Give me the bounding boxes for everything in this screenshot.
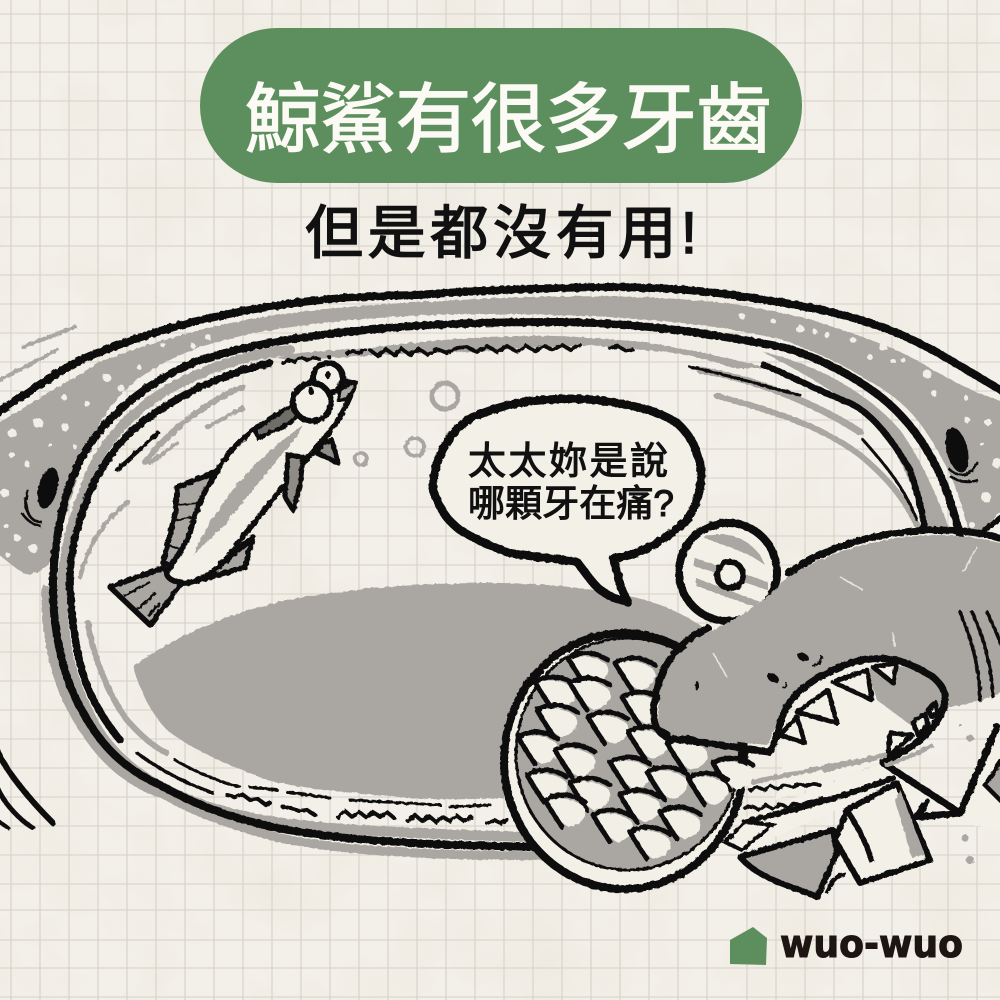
jaw lines bbox=[745, 778, 893, 822]
small loop bbox=[826, 874, 846, 893]
whale body gray band bbox=[0, 296, 1000, 574]
goby fish bbox=[110, 363, 356, 625]
gray gum band under upper lip bbox=[277, 336, 767, 368]
shark lower jaw bbox=[743, 727, 1000, 848]
bubbles bbox=[355, 383, 458, 465]
fish tail bbox=[110, 568, 182, 625]
mirror disc bbox=[679, 523, 777, 621]
shark outline bbox=[654, 530, 1000, 817]
gray mouth linings bbox=[0, 327, 918, 856]
title text: 鯨鯊有很多牙齒 bbox=[245, 78, 772, 163]
right edge fin bbox=[985, 755, 1000, 805]
speckles bbox=[958, 724, 974, 864]
shark dentist bbox=[654, 515, 1000, 897]
back of mouth bbox=[867, 666, 945, 727]
scales bbox=[518, 653, 753, 859]
whale eye right bbox=[941, 425, 978, 482]
small gray stroke near jaw corner bbox=[885, 745, 933, 765]
speech line one: 太太妳是說 bbox=[468, 441, 668, 483]
white spots on whale bbox=[0, 313, 1000, 558]
mirror centre ring bbox=[717, 562, 743, 588]
mirror stripes bbox=[694, 534, 768, 607]
anal fin bbox=[190, 537, 253, 583]
top right fin line bbox=[980, 515, 1000, 533]
round scale patch bbox=[504, 633, 753, 889]
white strip to patch bbox=[725, 822, 772, 850]
speech line two: 哪顆牙在痛? bbox=[468, 483, 674, 524]
zigzag teeth lines bbox=[283, 345, 633, 363]
subtitle: 但是都沒有用! bbox=[305, 201, 697, 266]
whale tail flukes bbox=[0, 750, 53, 828]
mouth interior bbox=[775, 665, 945, 800]
fish body bbox=[167, 378, 355, 583]
dorsal fin bbox=[163, 473, 213, 566]
jaw gray strokes bbox=[753, 755, 885, 782]
shark highlights bbox=[713, 547, 977, 677]
shark head and body bbox=[658, 535, 1000, 745]
speech text bbox=[468, 441, 674, 524]
whale inner mouth line bbox=[70, 345, 925, 823]
dark back band bbox=[255, 403, 302, 438]
shark white fin bbox=[835, 783, 930, 883]
pectoral fin bbox=[285, 455, 303, 510]
logo bbox=[730, 922, 963, 966]
fish lips bbox=[338, 383, 356, 400]
whale shark illustration bbox=[0, 287, 1000, 897]
whale upper lip line bbox=[0, 287, 1000, 414]
gray patch bbox=[740, 830, 837, 897]
logo wordmark: wuo-wuo bbox=[780, 922, 963, 966]
belly stripe bbox=[193, 425, 303, 555]
title banner bbox=[200, 28, 802, 183]
whale eye left bbox=[22, 465, 62, 526]
logo house icon bbox=[730, 927, 767, 965]
shark eyes and nostril bbox=[695, 650, 811, 691]
whale mouth oval line bbox=[53, 322, 960, 847]
second fin bbox=[317, 440, 338, 463]
shark teeth bbox=[780, 663, 937, 757]
fish eyes bbox=[313, 363, 343, 393]
gray water shadow bbox=[133, 583, 740, 799]
fin gray strip bbox=[895, 790, 925, 858]
shark eye creases bbox=[782, 656, 822, 687]
fin crease bbox=[848, 812, 872, 862]
shark gills bbox=[960, 612, 1000, 700]
speech bubble outline bbox=[433, 399, 701, 602]
